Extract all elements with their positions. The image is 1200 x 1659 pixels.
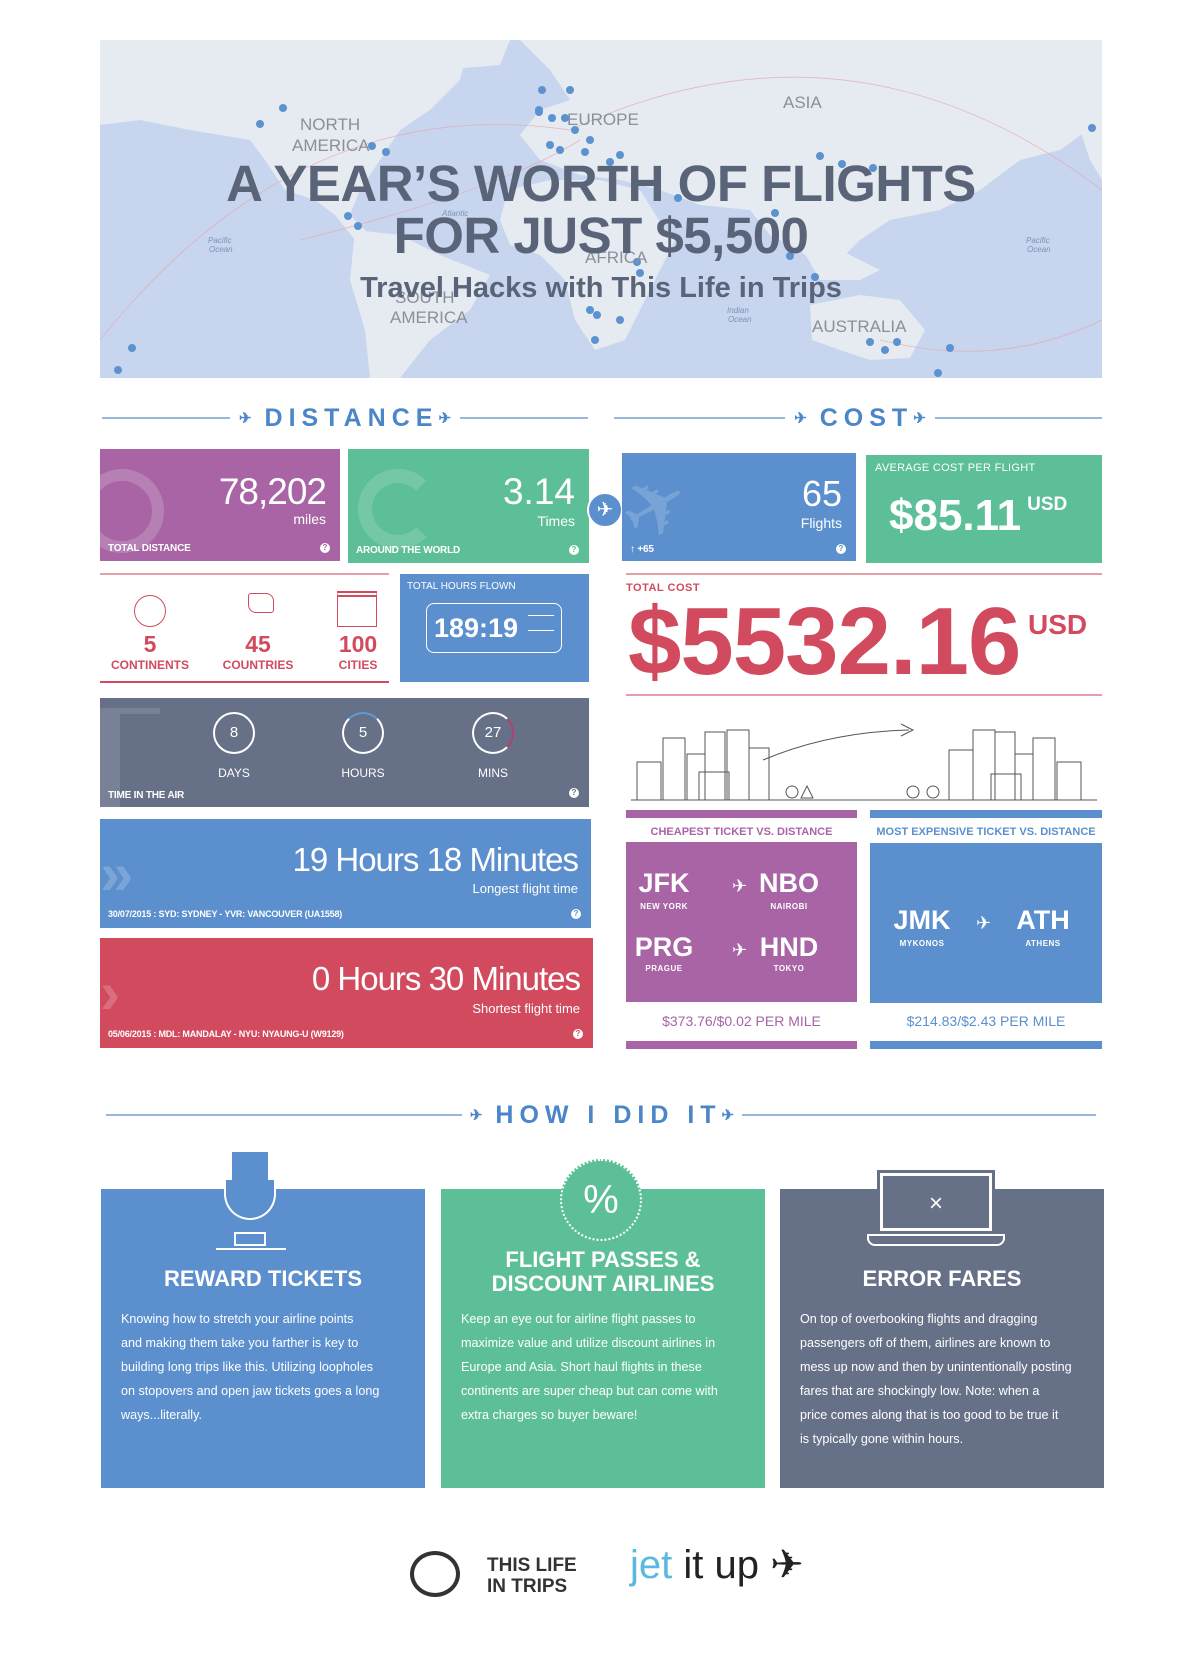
total cost: TOTAL COST	[626, 582, 700, 594]
panel: time in the air: MINS	[478, 766, 508, 780]
icon: laptop: ×	[929, 1190, 943, 1217]
map header: Ocean	[209, 245, 233, 254]
card: error fares: mess up now and then by unintentionally posting	[800, 1360, 1072, 1374]
card: reward tickets: building long trips like this. Utilizing loopholes	[121, 1360, 373, 1374]
panel: stats	[100, 573, 389, 683]
heading: distance: ✈ DISTANCE✈	[239, 404, 451, 432]
panel: most expensive ticket: $214.83/$2.43 PER MILE	[907, 1013, 1065, 1029]
panel: most expensive ticket: MYKONOS	[900, 939, 944, 948]
card: error fares: ERROR FARES	[863, 1266, 1021, 1291]
map header: SOUTH	[395, 288, 454, 307]
panel: cheapest ticket	[626, 810, 857, 1049]
card: reward tickets: and making them take you farther is key to	[121, 1336, 358, 1350]
panel: flights: 65	[802, 473, 842, 514]
icon: plane circle	[587, 492, 623, 528]
icon: discount badge	[560, 1159, 642, 1241]
logo: this life in trips	[410, 1551, 577, 1597]
card: flight passes: Europe and Asia. Short haul flights in these	[461, 1360, 702, 1374]
panel: longest flight: Longest flight time	[472, 881, 578, 896]
panel: cheapest ticket: HND	[760, 932, 818, 962]
panel: cheapest ticket: JFK	[638, 868, 690, 898]
panel: flights: ↑ +65	[630, 544, 654, 555]
panel: total hours flown	[400, 574, 589, 682]
panel: shortest flight: ?	[576, 1029, 580, 1038]
title: A YEAR’S WORTH OF FLIGHTS	[226, 155, 976, 212]
card: flight passes: continents are super cheap but can come with	[461, 1384, 718, 1398]
panel: most expensive ticket: ATHENS	[1025, 939, 1061, 948]
panel: stats: CONTINENTS	[111, 658, 189, 672]
panel: most expensive ticket: MOST EXPENSIVE TICKET VS. DISTANCE	[876, 826, 1096, 838]
panel: cheapest ticket: TOKYO	[774, 964, 804, 973]
logo: this life in trips: IN TRIPS	[487, 1576, 567, 1597]
panel: average cost: $85.11 USD	[889, 491, 1067, 540]
panel: total hours flown: TOTAL HOURS FLOWN	[407, 581, 516, 592]
card: reward tickets: on stopovers and open jaw tickets goes a long	[121, 1384, 379, 1398]
map header: AMERICA	[390, 308, 468, 327]
panel: flights: Flights	[801, 515, 842, 531]
card: flight passes: Keep an eye out for airline flight passes to	[461, 1312, 696, 1326]
panel: stats: CITIES	[339, 658, 377, 672]
map header: NORTH	[300, 115, 360, 134]
panel: time in the air: HOURS	[341, 766, 385, 780]
panel: around the world: AROUND THE WORLD	[356, 545, 460, 556]
panel: around the world: 3.14	[503, 471, 575, 512]
map header: Atlantic	[441, 209, 468, 218]
panel: flights: ?	[839, 544, 843, 553]
map header: Pacific	[208, 236, 232, 245]
panel: stats: 5	[144, 631, 156, 657]
map header: ASIA	[783, 93, 822, 112]
panel: flights	[622, 453, 856, 561]
logo: this life in trips: THIS LIFE	[487, 1555, 577, 1576]
panel: total hours flown: 189:19	[434, 613, 518, 643]
panel: cheapest ticket: CHEAPEST TICKET VS. DISTANCE	[651, 826, 832, 838]
panel: total distance: ?	[323, 543, 327, 552]
map header: Ocean	[1027, 245, 1051, 254]
panel: longest flight: 30/07/2015 : SYD: SYDNEY - YVR: VANCOUVER (UA1558)	[108, 909, 342, 919]
panel: time in the air	[100, 698, 589, 807]
card: reward tickets: ways...literally.	[121, 1408, 202, 1422]
map header: AMERICA	[292, 136, 370, 155]
map header: Ocean	[728, 315, 752, 324]
card: flight passes: maximize value and utilize discount airlines in	[461, 1336, 715, 1350]
icon: globe	[134, 595, 166, 627]
panel: total distance: TOTAL DISTANCE	[108, 543, 191, 554]
total cost: $5532.16	[628, 588, 1020, 695]
card: flight passes: FLIGHT PASSES &	[505, 1247, 701, 1272]
panel: time in the air: 27	[485, 724, 501, 741]
subtitle: Travel Hacks with This Life in Trips	[360, 272, 842, 304]
card: flight passes: DISCOUNT AIRLINES	[492, 1271, 714, 1296]
card: error fares: On top of overbooking flights and dragging	[800, 1312, 1037, 1326]
map header: Indian	[727, 306, 749, 315]
panel: cheapest ticket: $373.76/$0.02 PER MILE	[662, 1013, 821, 1029]
panel: cheapest ticket: NAIROBI	[770, 902, 808, 911]
panel: shortest flight: Shortest flight time	[472, 1001, 580, 1016]
card: error fares: passengers off of them, airlines are known to	[800, 1336, 1050, 1350]
title: FOR JUST $5,500	[394, 207, 808, 264]
title	[226, 155, 976, 264]
panel: longest flight: 19 Hours 18 Minutes	[292, 841, 578, 878]
skyline illustration	[631, 724, 1097, 800]
panel: cheapest ticket: ✈	[732, 940, 747, 960]
panel: around the world	[348, 449, 589, 563]
panel: shortest flight	[100, 938, 593, 1048]
panel: cheapest ticket: NEW YORK	[640, 902, 688, 911]
panel: around the world: Times	[537, 513, 575, 529]
icon: trophy	[216, 1152, 286, 1250]
card: reward tickets: REWARD TICKETS	[164, 1266, 362, 1291]
panel: stats: 45	[245, 631, 271, 657]
panel: total distance: miles	[293, 511, 326, 527]
panel: stats: COUNTRIES	[223, 658, 293, 672]
panel: longest flight: ?	[574, 909, 578, 918]
map header: AFRICA	[585, 248, 648, 267]
panel: most expensive ticket: ✈	[976, 913, 991, 933]
card: error fares: is typically gone within hours.	[800, 1432, 963, 1446]
total cost: USD	[1028, 609, 1087, 640]
panel: time in the air: 5	[359, 724, 367, 741]
icon: flag	[248, 593, 274, 613]
logo: jet it up: jet it up ✈	[630, 1543, 804, 1587]
card: reward tickets	[101, 1189, 425, 1488]
map header: AUSTRALIA	[812, 317, 907, 336]
panel: cheapest ticket: NBO	[759, 868, 819, 898]
panel: most expensive ticket: ATH	[1016, 905, 1070, 935]
map header: Pacific	[1026, 236, 1050, 245]
icon: laptop	[867, 1170, 1005, 1246]
panel: shortest flight: ›	[100, 959, 120, 1026]
card: error fares	[780, 1189, 1104, 1488]
panel: cheapest ticket: ✈	[732, 876, 747, 896]
panel: longest flight: »	[100, 840, 133, 907]
panel: average cost	[866, 455, 1102, 563]
panel: around the world: ?	[572, 545, 576, 554]
panel: cheapest ticket: PRG	[635, 932, 693, 962]
map header: EUROPE	[567, 110, 639, 129]
panel: shortest flight: 05/06/2015 : MDL: MANDALAY - NYU: NYAUNG-U (W9129)	[108, 1029, 344, 1039]
panel: stats: 100	[339, 631, 377, 657]
icon: discount badge: %	[583, 1178, 619, 1222]
card: reward tickets: Knowing how to stretch your airline points	[121, 1312, 353, 1326]
panel: most expensive ticket: JMK	[893, 905, 950, 935]
heading: how i did it: ✈ HOW I DID IT✈	[470, 1101, 734, 1129]
panel: average cost: AVERAGE COST PER FLIGHT	[875, 462, 1036, 474]
card: flight passes	[441, 1189, 765, 1488]
panel: most expensive ticket	[870, 810, 1102, 1049]
panel: total distance	[100, 449, 340, 561]
card: flight passes: extra charges so buyer beware!	[461, 1408, 637, 1422]
panel: time in the air: ?	[572, 788, 576, 797]
card: error fares: price comes along that is too good to be true it	[800, 1408, 1058, 1422]
icon: city	[337, 591, 377, 627]
panel: total distance: 78,202	[219, 471, 326, 512]
panel: shortest flight: 0 Hours 30 Minutes	[312, 960, 580, 997]
panel: time in the air: TIME IN THE AIR	[108, 790, 184, 801]
panel: cheapest ticket: PRAGUE	[645, 964, 683, 973]
icon: plane circle: ✈	[597, 499, 613, 521]
map header	[100, 40, 1102, 378]
card: error fares: fares that are shockingly low. Note: when a	[800, 1384, 1039, 1398]
heading: cost: ✈ COST✈	[794, 404, 926, 432]
panel: time in the air: 8	[230, 724, 238, 741]
panel: time in the air: DAYS	[218, 766, 250, 780]
panel: longest flight	[100, 819, 591, 928]
